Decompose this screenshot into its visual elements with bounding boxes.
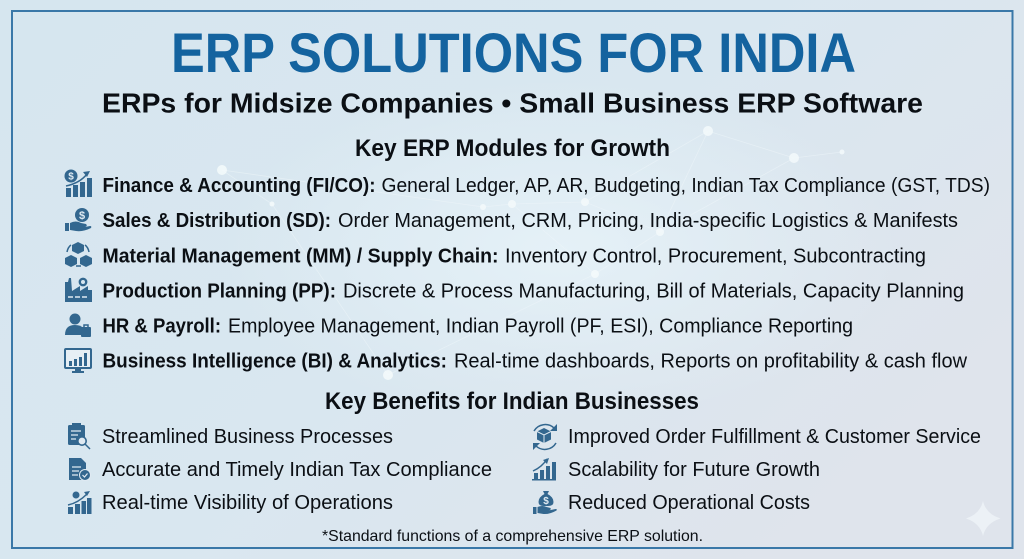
benefit: real-time visibility [68, 491, 393, 514]
heading: key benefits: Key Benefits for Indian Businesses [325, 388, 699, 415]
icon: document with check [69, 458, 90, 480]
text: HR row: Employee Management, Indian Payroll (PF, ESI), Compliance Reporting [228, 314, 853, 338]
text: HR row: HR & Payroll: [102, 314, 221, 338]
text: finance row: General Ledger, AP, AR, Budgeting, Indian Tax Compliance (GST, TDS) [382, 174, 990, 197]
text: Real-time Visibility of Operations [102, 491, 393, 514]
footnote: *Standard functions of a comprehensive ERP solution. [322, 528, 703, 545]
module: business intelligence [65, 349, 967, 373]
icon: person with badge [65, 314, 91, 337]
text: Accurate and Timely Indian Tax Compliance [102, 458, 492, 481]
icon: finance chart with coin: $ [68, 172, 74, 182]
icon: monitor with chart [65, 349, 91, 373]
module: HR and payroll [65, 314, 853, 338]
benefit: scalability [532, 458, 820, 481]
heading: key ERP modules: Key ERP Modules for Growth [355, 135, 670, 162]
text: production row: Production Planning (PP): [102, 280, 336, 302]
icon: factory with gear [65, 278, 92, 302]
text: production row: Discrete & Process Manufacturing, Bill of Materials, Capacity Planning [343, 280, 964, 302]
icon: chart with arrow and person [68, 491, 92, 514]
icon: clipboard with magnifier [68, 423, 90, 449]
text: BI row: Business Intelligence (BI) & Analytics: [102, 350, 447, 372]
module: sales and distribution [65, 208, 958, 232]
text: Improved Order Fulfillment & Customer Service [568, 425, 981, 448]
benefit: reduced costs [533, 491, 810, 514]
text: sales row: Sales & Distribution (SD): [102, 209, 331, 232]
icon: finance chart with coin [64, 170, 92, 197]
icon: rising bars [532, 458, 556, 480]
benefit: tax compliance [69, 458, 492, 481]
subtitle: ERPs for Midsize Companies • Small Business ERP Software [102, 88, 923, 118]
icon: box with cycle arrows [533, 424, 557, 450]
icon: hand with money bag: $ [543, 496, 549, 507]
text: material row: Material Management (MM) / Supply Chain: [102, 244, 498, 268]
icon: hand with coin: $ [79, 210, 85, 222]
icon: hand with coin [65, 208, 91, 231]
text: Scalability for Future Growth [568, 458, 820, 481]
text: Reduced Operational Costs [568, 491, 810, 514]
icon: three boxes [65, 242, 92, 267]
text: sales row: Order Management, CRM, Pricing, India-specific Logistics & Manifests [338, 209, 958, 232]
icon: hand with money bag [533, 491, 557, 514]
text: Streamlined Business Processes [102, 425, 393, 448]
benefit: order fulfillment [533, 424, 981, 450]
benefit: streamlined processes [68, 423, 393, 449]
benefits: left column [68, 423, 492, 514]
text: finance row: Finance & Accounting (FI/CO): [102, 174, 376, 197]
module: material management [65, 242, 926, 268]
text: material row: Inventory Control, Procurement, Subcontracting [505, 244, 926, 268]
text: BI row: Real-time dashboards, Reports on profitability & cash flow [454, 350, 967, 372]
title: ERP SOLUTIONS FOR INDIA [171, 21, 856, 84]
icon: sparkle watermark [966, 501, 1000, 536]
module: production planning [65, 278, 964, 302]
benefits: right column [532, 424, 981, 514]
module: finance and accounting [64, 170, 990, 197]
module list [64, 170, 990, 373]
